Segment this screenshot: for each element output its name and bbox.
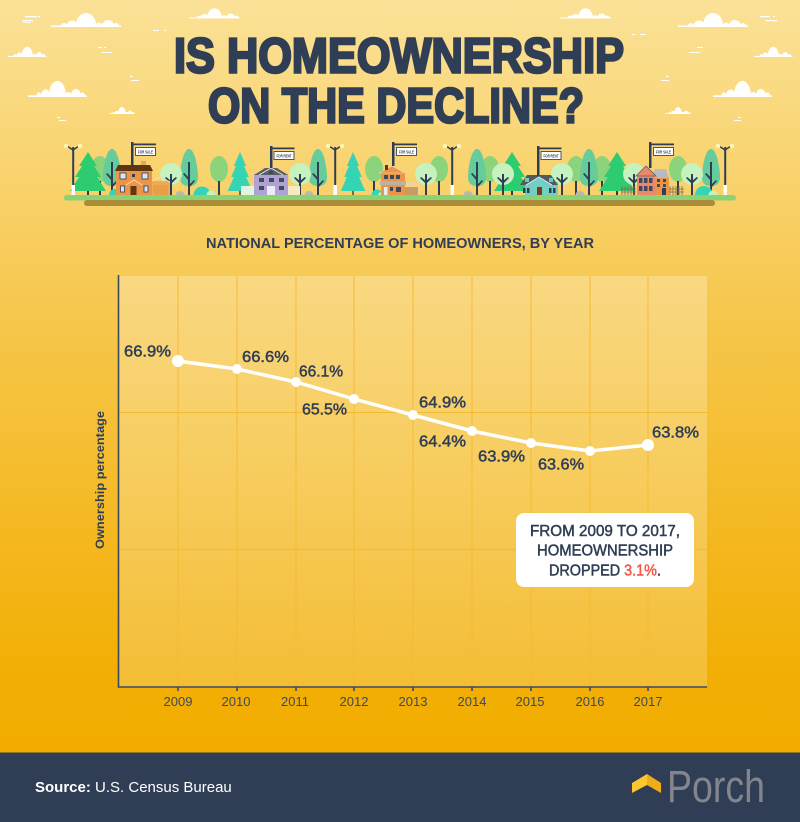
x axis labels <box>164 694 662 709</box>
data labels: 63.6% <box>538 456 584 474</box>
house 4: teal <box>520 175 558 195</box>
line chart <box>93 275 707 709</box>
data labels: 64.4% <box>419 434 466 450</box>
callout: HOMEOWNERSHIP <box>537 542 673 560</box>
lamp posts <box>64 144 734 195</box>
for sale sign 3 <box>649 142 674 168</box>
tall teal trees <box>103 149 720 195</box>
plot area <box>119 276 707 687</box>
ground <box>64 195 736 206</box>
source: Source: U.S. Census Bureau <box>35 779 232 796</box>
data line <box>178 361 648 451</box>
x axis labels: 2011 <box>281 694 309 709</box>
house 2: purple <box>241 168 300 195</box>
clouds <box>8 8 792 121</box>
x axis labels: 2009 <box>164 694 192 709</box>
callout: DROPPED 3.1%. <box>549 562 661 580</box>
data labels: 63.9% <box>478 448 525 466</box>
neighborhood illustration <box>64 142 736 206</box>
data points <box>172 355 654 456</box>
for rent sign 2: FOR RENT <box>544 153 559 158</box>
data labels: 66.9% <box>124 344 171 360</box>
data labels: 65.5% <box>302 402 347 418</box>
chart heading: NATIONAL PERCENTAGE OF HOMEOWNERS, BY YEAR <box>206 236 595 252</box>
round pale trees <box>160 163 703 195</box>
house 3: orange with garage <box>379 165 420 195</box>
x axis labels: 2012 <box>340 694 368 709</box>
for rent sign 2 <box>537 146 562 176</box>
data labels: 66.1% <box>299 364 343 380</box>
for rent sign 1 <box>270 146 294 168</box>
x axis labels: 2013 <box>399 694 427 709</box>
bushes and rocks <box>109 186 718 204</box>
callout: FROM 2009 TO 2017, <box>530 523 680 540</box>
data labels: 63.8% <box>652 424 699 442</box>
title: IS HOMEOWNERSHIP <box>174 30 624 84</box>
for sale sign 2: FOR SALE <box>399 149 414 154</box>
title <box>174 30 624 134</box>
x axis labels: 2014 <box>458 694 486 709</box>
x axis labels: 2017 <box>634 694 662 709</box>
for sale sign 1: FOR SALE <box>138 149 153 154</box>
porch logo: Porch <box>667 761 765 812</box>
y axis label: Ownership percentage <box>93 411 107 549</box>
data labels: 66.6% <box>242 349 289 366</box>
data labels: 64.9% <box>419 394 466 412</box>
porch logo <box>632 761 765 812</box>
x axis labels: 2015 <box>516 694 544 709</box>
house 5: coral and gray <box>621 166 684 195</box>
x axis labels: 2016 <box>576 694 604 709</box>
back row of light trees <box>91 156 687 195</box>
fir trees <box>70 152 635 195</box>
callout <box>516 513 694 587</box>
title: ON THE DECLINE? <box>208 80 584 134</box>
axes <box>118 275 707 691</box>
data labels <box>124 344 699 474</box>
for rent sign 1: FOR RENT <box>276 153 292 158</box>
x axis labels: 2010 <box>222 694 250 709</box>
house 1: orange <box>115 161 170 195</box>
for sale sign 2 <box>392 142 417 166</box>
for sale sign 1 <box>131 142 156 166</box>
for sale sign 3: FOR SALE <box>656 149 671 154</box>
footer bar <box>0 752 800 822</box>
